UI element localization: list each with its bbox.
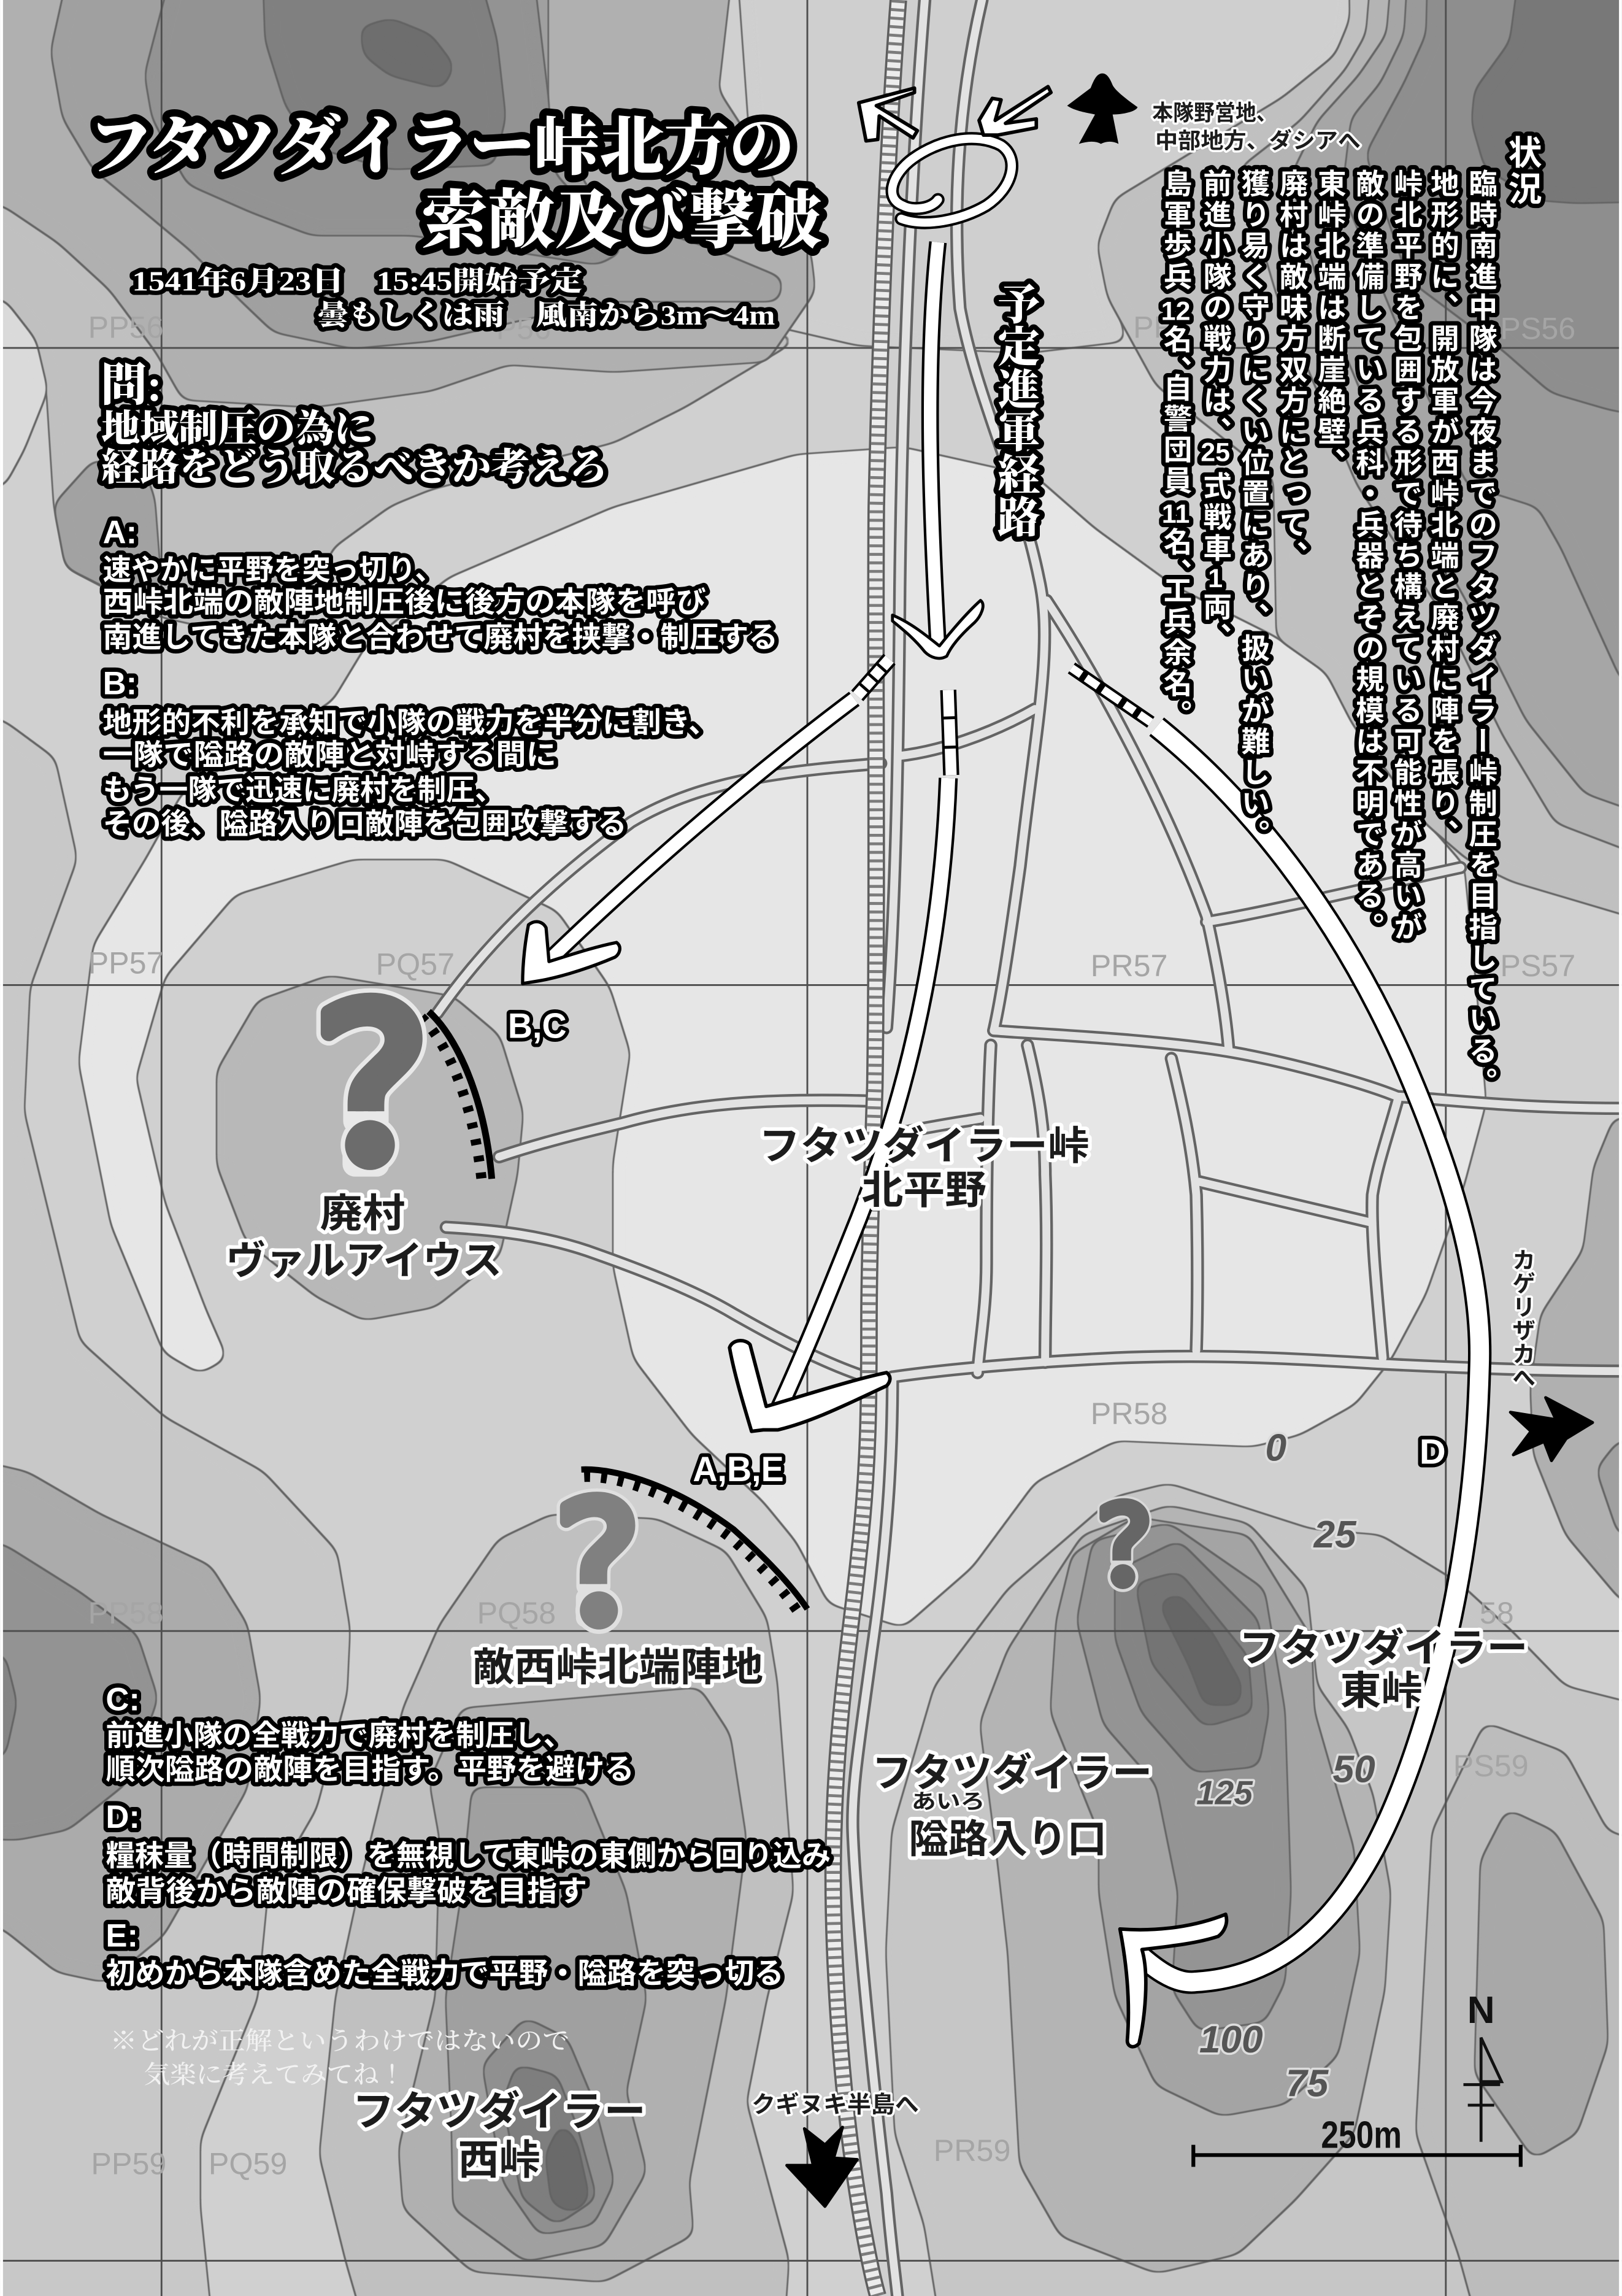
main camp label: 本隊野営地、 <box>1152 101 1277 125</box>
grid labels: PR59 <box>934 2133 1010 2168</box>
cliff: west pass north end <box>582 1470 807 1615</box>
question mark: ruined village <box>317 988 427 1177</box>
grid labels: PR <box>1133 310 1176 344</box>
date and weather: 1541年6月23日 15:45開始予定 <box>132 266 583 297</box>
option A: A: <box>103 514 137 550</box>
north arrow: N <box>1467 1989 1495 2032</box>
note <box>110 2027 569 2089</box>
place: narrow path entrance: フタツダイラー <box>872 1751 1152 1795</box>
place: north plain: フタツダイラー峠 <box>759 1124 1089 1168</box>
situation vertical text: 1 <box>1208 564 1223 593</box>
grid labels: PS56 <box>1500 312 1575 346</box>
grid labels: PP58 <box>88 1596 164 1630</box>
north arrow <box>1464 1989 1502 2142</box>
situation vertical text: 工兵余名。 <box>1160 576 1192 730</box>
question mark: ruined village: ? <box>313 960 430 1216</box>
place: narrow path entrance: あいろ <box>912 1791 985 1814</box>
situation vertical text: 廃村は敵味方双方にとって、 <box>1276 169 1308 571</box>
situation vertical text: 名、 <box>1160 527 1192 589</box>
scale bar <box>1193 2114 1521 2167</box>
option C <box>106 1681 634 1786</box>
railway <box>833 0 898 2296</box>
situation vertical text: 状況 <box>1503 135 1542 207</box>
place: east pass: フタツダイラー <box>1239 1626 1528 1670</box>
option C: C: <box>106 1681 140 1717</box>
situation vertical text: 前進小隊の戦力は、 <box>1199 169 1231 447</box>
march route arrow: planned <box>893 242 983 658</box>
grid labels: PR58 <box>1091 1396 1167 1431</box>
contour elevation labels: 125 <box>1196 1773 1253 1811</box>
roads <box>437 0 1622 2296</box>
main camp label: 中部地方、ダシアへ <box>1155 129 1361 153</box>
question heading: 経路をどう取るべきか考えろ <box>101 447 608 488</box>
route arrow D <box>1072 668 1480 2047</box>
marker: main force <box>1067 74 1137 144</box>
grid labels: PP57 <box>88 946 164 980</box>
route tags: D <box>1420 1432 1446 1471</box>
question mark: enemy camp: ? <box>555 1469 640 1657</box>
grid labels: PQ57 <box>376 947 455 982</box>
place: east pass: 東峠 <box>1340 1669 1423 1713</box>
contour elevation labels: 0 <box>1266 1427 1286 1470</box>
grid labels <box>88 310 1575 2181</box>
option E <box>106 1918 784 1990</box>
situation vertical text: 25 <box>1201 437 1230 467</box>
marker: east exit <box>1510 1398 1593 1461</box>
question heading: 問: <box>101 361 162 411</box>
option A <box>103 514 778 654</box>
situation vertical text: 自警団員 <box>1160 373 1192 497</box>
situation vertical text: 式戦車 <box>1199 471 1231 564</box>
grid labels: P56 <box>496 312 551 346</box>
option C: 順次隘路の敵陣を目指す。平野を避ける <box>106 1754 634 1786</box>
grid labels: PR57 <box>1091 949 1167 983</box>
question mark: east pass: ? <box>1096 1483 1153 1606</box>
situation vertical text: 名、 <box>1160 325 1192 387</box>
route tags: B,C <box>508 1007 567 1046</box>
loop and turn arrows <box>859 87 1051 223</box>
east exit label: カゲリザカへ <box>1509 1248 1536 1389</box>
place: ruined village: ヴァルアイウス <box>226 1239 502 1283</box>
south exit label: クギヌキ半島へ <box>751 2092 919 2118</box>
situation vertical text: 12 <box>1161 297 1191 326</box>
option E: 初めから本隊含めた全戦力で平野・隘路を突っ切る <box>106 1957 784 1990</box>
question heading: 地域制圧の為に <box>101 408 373 450</box>
cliff: ruined village <box>421 1011 492 1179</box>
situation vertical text: 地形的に、開放軍が西峠北端と廃村に陣を張り、 <box>1427 169 1459 850</box>
situation vertical text: 東峠北端は断崖絶壁、 <box>1314 169 1346 479</box>
option D: 敵背後から敵陣の確保撃破を目指す <box>106 1875 587 1908</box>
grid labels: PQ58 <box>477 1596 556 1630</box>
title: 索敵及び撃破 <box>418 185 822 256</box>
option D: 糧秣量（時間制限）を無視して東峠の東側から回り込み <box>106 1840 831 1873</box>
option B: その後、隘路入り口敵陣を包囲攻撃する <box>103 808 627 841</box>
route arrow A,B,E <box>729 690 951 1431</box>
option B: 一隊で隘路の敵陣と対峙する間に <box>103 739 556 772</box>
situation vertical text: 両、 <box>1199 591 1231 653</box>
situation vertical text: 島軍歩兵 <box>1160 169 1192 293</box>
place: enemy camp: 敵西峠北端陣地 <box>473 1646 763 1690</box>
grid labels: PS57 <box>1500 949 1575 983</box>
place: west pass: フタツダイラー <box>352 2089 646 2135</box>
note: ※どれが正解というわけではないので <box>110 2027 569 2055</box>
route arrow B,C <box>523 659 890 984</box>
option E: E: <box>106 1918 138 1954</box>
title <box>88 111 822 256</box>
grid labels: PS59 <box>1453 1749 1529 1783</box>
option B: もう一隊で迅速に廃村を制圧、 <box>103 774 504 807</box>
option A: 西峠北端の敵陣地制圧後に後方の本隊を呼び <box>103 587 706 619</box>
place: narrow path entrance <box>872 1751 1152 1861</box>
option B: B: <box>103 666 137 702</box>
option B <box>103 666 718 841</box>
option A: 速やかに平野を突っ切り、 <box>103 554 444 587</box>
main camp label <box>1152 101 1361 153</box>
question mark: east pass: ? <box>1096 1483 1153 1606</box>
grid labels: PP59 <box>91 2146 166 2181</box>
date and weather: 曇もしくは雨 風南から3m～4m <box>317 299 775 331</box>
option D <box>106 1799 831 1908</box>
route tags <box>508 1007 1446 1489</box>
question mark: enemy camp: ? <box>555 1469 640 1657</box>
place: west pass: 西峠 <box>458 2137 540 2183</box>
marker: south exit <box>787 2127 857 2206</box>
contour elevation labels <box>1196 1427 1375 2105</box>
option C: 前進小隊の全戦力で廃村を制圧し、 <box>106 1720 572 1752</box>
option B: 地形的不利を承知で小隊の戦力を半分に割き、 <box>103 707 718 739</box>
scale bar: 250m <box>1321 2114 1402 2156</box>
contour elevation labels: 100 <box>1199 2019 1263 2061</box>
place: ruined village <box>226 1192 502 1283</box>
grid labels: 58 <box>1480 1596 1514 1630</box>
date and weather <box>132 266 775 331</box>
route tags: A,B,E <box>693 1450 784 1489</box>
place: narrow path entrance: 隘路入り口 <box>909 1817 1107 1861</box>
situation vertical text: 11 <box>1162 499 1190 529</box>
option D: D: <box>106 1799 140 1835</box>
planned route label: 予定進軍経路 <box>991 282 1040 537</box>
place: ruined village: 廃村 <box>320 1192 405 1236</box>
place: north plain: 北平野 <box>862 1168 986 1212</box>
situation vertical text: 峠北平野を包囲する形で待ち構えている可能性が高いが <box>1390 169 1423 943</box>
grid labels: PP56 <box>88 310 164 344</box>
option A: 南進してきた本隊と合わせて廃村を挟撃・制圧する <box>103 622 778 654</box>
situation vertical text <box>1160 135 1542 1098</box>
note: 気楽に考えてみてね！ <box>144 2061 405 2089</box>
situation vertical text: 獲り易く守りにくい位置にあり、扱いが難しい。 <box>1237 169 1270 850</box>
contour elevation labels: 75 <box>1286 2063 1329 2105</box>
place: east pass <box>1239 1626 1528 1713</box>
contour elevation labels: 50 <box>1333 1749 1375 1791</box>
place: west pass <box>352 2089 646 2183</box>
place: north plain <box>759 1124 1089 1212</box>
situation vertical text: 敵の準備している兵科・兵器とその規模は不明である。 <box>1352 169 1384 943</box>
question heading <box>101 361 608 488</box>
question mark: ruined village: ? <box>313 960 430 1216</box>
title: フタツダイラー峠北方の <box>88 111 794 183</box>
grid labels: PQ59 <box>209 2146 287 2181</box>
contour elevation labels: 25 <box>1313 1514 1357 1556</box>
situation vertical text: 臨時南進中隊は今夜までのフタツダイラー峠制圧を目指している。 <box>1465 169 1497 1098</box>
